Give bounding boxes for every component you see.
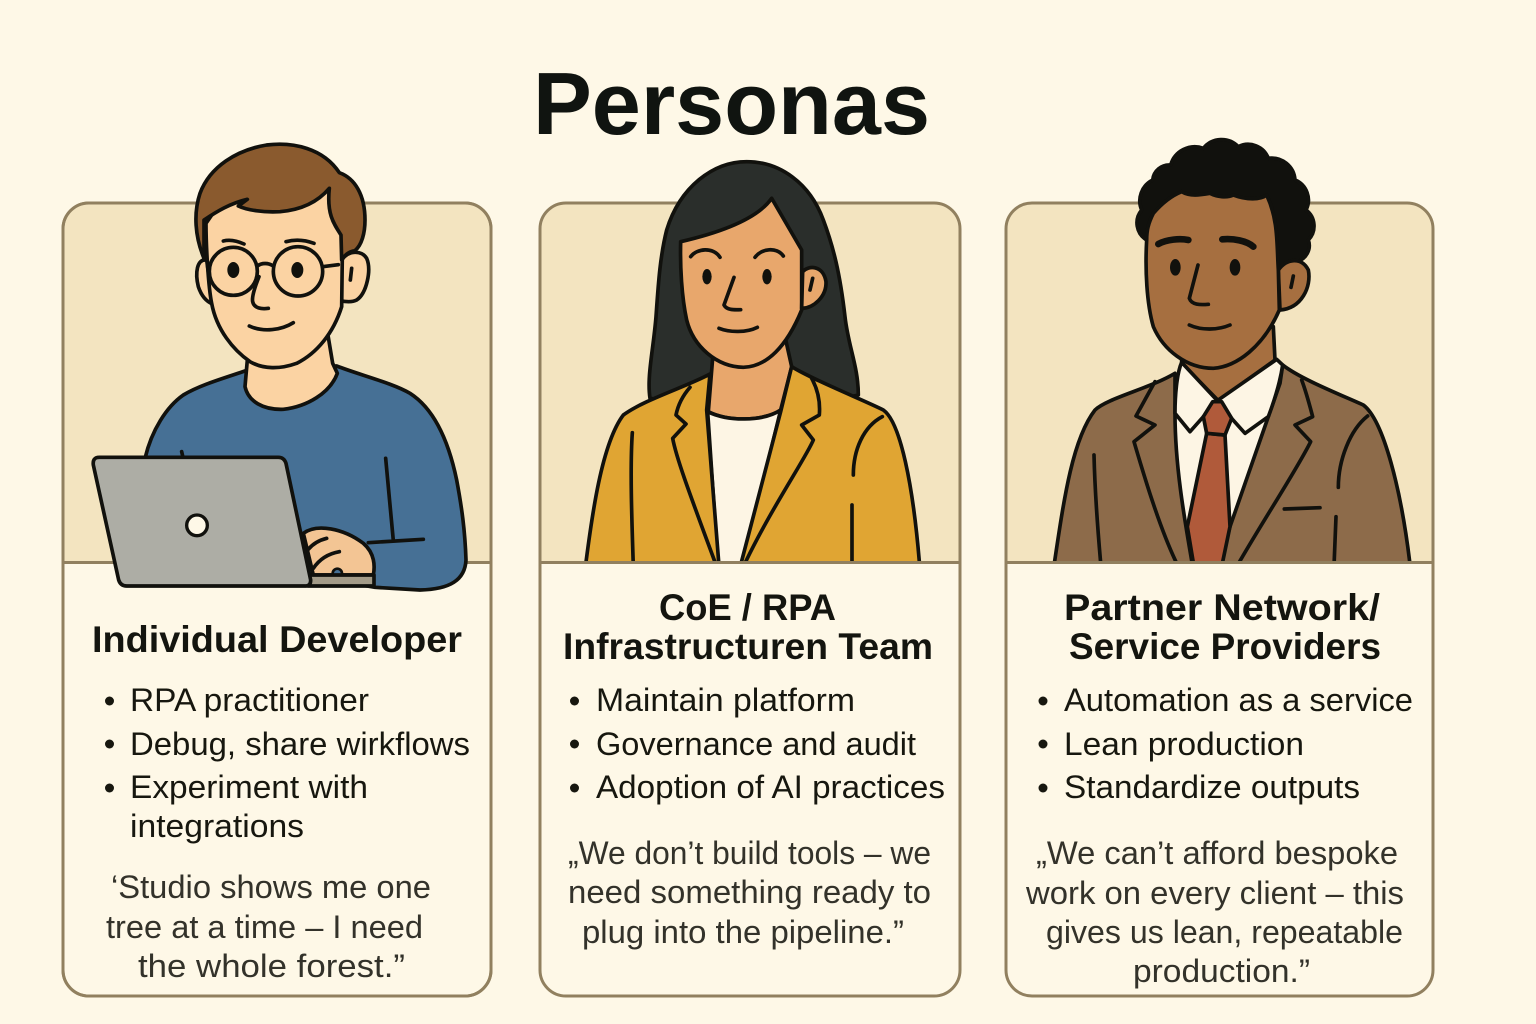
heading: Partner Network/ <box>1064 587 1380 628</box>
heading <box>1064 587 1381 667</box>
illustration: woman in yellow blazer <box>585 162 920 570</box>
neck <box>245 333 337 409</box>
hand <box>303 528 374 575</box>
ear <box>1278 261 1309 310</box>
quote: production.” <box>1133 953 1310 989</box>
quote: plug into the pipeline.” <box>582 914 904 950</box>
heading <box>563 587 933 667</box>
bullet list: integrations <box>130 808 304 844</box>
hair <box>649 162 858 417</box>
shirt <box>708 410 781 570</box>
quote: the whole forest.” <box>138 948 405 984</box>
neck <box>1182 327 1275 401</box>
quote: tree at a time – I need <box>106 909 423 945</box>
quote: ‘Studio shows me one <box>111 869 431 905</box>
bullet list: Governance and audit <box>596 726 916 762</box>
heading: Infrastructuren Team <box>563 626 933 667</box>
bullet list: Debug, share wirkflows <box>130 726 470 762</box>
quote <box>106 869 431 984</box>
shirt <box>1176 418 1264 520</box>
quote: „We can’t afford bespoke <box>1036 835 1398 871</box>
eyes and brows <box>227 262 239 278</box>
jacket left <box>1053 373 1193 570</box>
lapels and pleats <box>1094 380 1368 567</box>
bullet list: Experiment with <box>130 769 368 805</box>
heading: Individual Developer <box>92 619 462 660</box>
bullet list <box>1038 682 1413 805</box>
nose and mouth <box>249 277 293 330</box>
bullet list: RPA practitioner <box>130 682 369 718</box>
illustration: man in brown suit <box>1053 140 1411 570</box>
necktie <box>1187 433 1230 567</box>
ears <box>197 260 213 304</box>
bullet list: Automation as a service <box>1064 682 1413 718</box>
quote: „We don’t build tools – we <box>568 835 931 871</box>
panel: CoE / RPA card <box>540 162 960 996</box>
bullet list: Maintain platform <box>596 682 855 718</box>
face <box>1146 192 1279 368</box>
heading: Service Providers <box>1069 626 1381 667</box>
facial features <box>1170 259 1181 276</box>
bullet list <box>105 682 470 844</box>
quote <box>1025 835 1404 989</box>
ear <box>802 268 826 308</box>
facial features <box>702 269 712 284</box>
bullet list: Adoption of AI practices <box>596 769 945 805</box>
panel: individual developer card <box>63 144 491 996</box>
collar <box>1175 362 1217 432</box>
face <box>681 198 802 367</box>
sweater <box>145 366 466 590</box>
title: Personas <box>533 54 930 153</box>
laptop base <box>308 575 374 586</box>
glasses <box>209 247 257 295</box>
jacket right <box>1218 365 1411 570</box>
jacket right <box>739 367 920 570</box>
hair <box>1137 140 1314 273</box>
quote: need something ready to <box>568 874 931 910</box>
quote: work on every client – this <box>1025 875 1404 911</box>
bullet list: Lean production <box>1064 726 1304 762</box>
laptop <box>93 457 311 586</box>
hair <box>196 144 365 260</box>
bullet list <box>570 682 945 805</box>
quote: gives us lean, repeatable <box>1046 914 1403 950</box>
lapels and pleats <box>631 378 882 567</box>
sleeve line <box>182 452 423 543</box>
jacket left <box>585 374 719 570</box>
illustration: developer with laptop <box>93 144 466 590</box>
heading: CoE / RPA <box>659 587 836 628</box>
bullet list: Standardize outputs <box>1064 769 1360 805</box>
quote <box>568 835 931 950</box>
neck <box>708 337 792 419</box>
panel: partner network card <box>1006 140 1433 996</box>
face <box>206 188 343 368</box>
